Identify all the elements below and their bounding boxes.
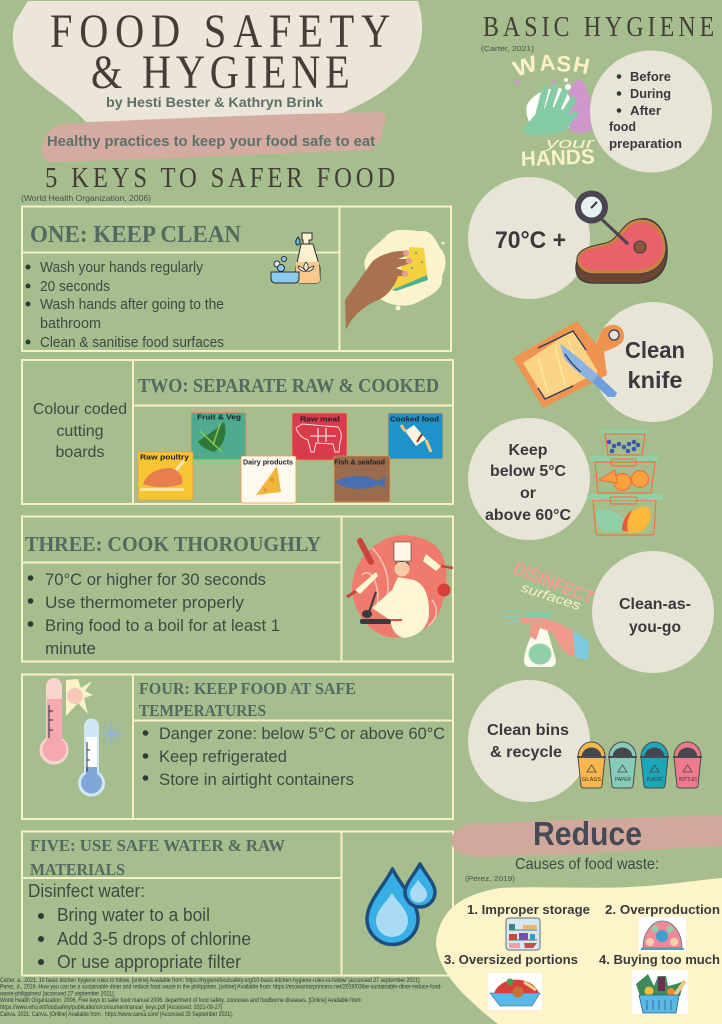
bin: bottles: BOTTLES — [679, 777, 698, 783]
title: & HYGIENE — [91, 46, 350, 99]
board: fish and seafood: Fish & seafood — [334, 460, 385, 466]
bin: plastic: PLASTIC — [647, 777, 663, 783]
icon: cutting board and knife — [513, 321, 624, 408]
bin: paper: PAPER — [615, 777, 631, 783]
board: cooked food — [388, 413, 443, 459]
heading three: THREE: COOK THOROUGHLY — [25, 532, 321, 556]
label: colour coded cutting boards: boards — [56, 444, 104, 461]
icon: cold thermometer — [78, 718, 124, 797]
citation: Perez: (Perez, 2019) — [465, 874, 516, 883]
circle: clean bins — [468, 680, 590, 802]
tagline: Healthy practices to keep your food safe to eat — [47, 133, 375, 150]
authors: by Hesti Bester & Kathryn Brink — [106, 94, 323, 110]
title — [50, 5, 390, 99]
circle: before during after: Before — [630, 70, 671, 84]
panel: causes of food waste — [436, 878, 722, 1024]
icon: disinfect surfaces: DISINFECT — [510, 558, 597, 610]
icon: basket of groceries — [632, 970, 688, 1014]
list one: Wash your hands regularly — [40, 259, 203, 276]
heading five: FIVE: USE SAFE WATER & RAW — [30, 836, 285, 855]
circle: 70C — [468, 177, 590, 299]
board: fruit and veg — [191, 412, 246, 460]
heading four: FOUR: KEEP FOOD AT SAFE — [139, 679, 356, 698]
circle: before during after: During — [630, 87, 671, 101]
icon: steak with thermometer — [575, 190, 667, 283]
panel: two separate raw and cooked — [22, 360, 453, 504]
circle: clean knife: Clean — [625, 337, 685, 363]
circle: before during after: food — [609, 120, 636, 134]
list three: Bring food to a boil for at least 1 — [45, 616, 280, 635]
heading four — [139, 679, 356, 720]
icon: disinfect surfaces: surfaces — [519, 580, 583, 613]
circle: clean bins: Clean bins — [487, 722, 569, 739]
title blob — [13, 1, 422, 122]
circle: keep below: above 60°C — [485, 507, 571, 524]
heading two: TWO: SEPARATE RAW & COOKED — [138, 375, 439, 397]
circle: before during after: After — [630, 104, 661, 118]
circle: keep below: below 5°C — [490, 463, 566, 480]
icon: wash your hands: H — [571, 51, 592, 79]
title: FOOD SAFETY — [50, 5, 390, 58]
list one: Wash hands after going to the — [40, 296, 224, 313]
references: waste-philippines/ [accessed 27 september 2021]. — [0, 992, 115, 998]
label: colour coded cutting boards — [33, 401, 127, 461]
cause 1: 1. Improper storage — [467, 902, 590, 917]
list four: Store in airtight containers — [159, 770, 354, 789]
bin: glass: GLASS — [582, 777, 602, 783]
list five: Add 3-5 drops of chlorine — [57, 928, 251, 949]
citation: WHO: (World Health Organization, 2006) — [21, 194, 151, 203]
cause 2: 2. Overproduction — [605, 902, 720, 917]
list five: Or use appropriate filter — [57, 951, 241, 972]
circle: clean as you go — [592, 551, 714, 673]
circle: keep below: Keep — [508, 442, 548, 459]
references: https://www.who.int/foodsafety/publications/consumer/manual_keys.pdf [Accessed: 2021-09-27] — [0, 1005, 222, 1011]
icon: display of cakes — [639, 917, 686, 952]
icon: wash your hands: S — [556, 51, 572, 77]
icon: chef — [347, 535, 453, 638]
references: Carter, a., 2021. 10 basic kitchen hygiene rules to follow. [online] Available from: https://hygienefoodsafety.org/10-basic-kitchen-hygiene-rules-to-follow/ [accessed 27 september 2021]. — [0, 978, 421, 984]
pink brush band: reduce — [451, 815, 722, 857]
label: colour coded cutting boards: Colour coded — [33, 401, 127, 418]
heading four: TEMPERATURES — [139, 701, 266, 720]
icon: water drops — [367, 864, 435, 944]
references — [0, 978, 442, 1018]
heading: reduce: Reduce — [533, 815, 642, 852]
circle: keep below — [468, 418, 590, 540]
icon: wash your hands: W — [510, 50, 541, 82]
circle: clean bins: & recycle — [490, 744, 562, 761]
icon: wash your hands: A — [538, 49, 557, 76]
heading: basic hygiene: BASIC HYGIENE — [483, 11, 714, 42]
list four: Danger zone: below 5°C or above 60°C — [159, 724, 445, 743]
icon: soap — [271, 233, 320, 283]
list four — [143, 724, 445, 789]
icon: hot thermometer — [40, 678, 93, 765]
panel: one keep clean — [22, 206, 451, 351]
list five: Disinfect water: — [28, 881, 145, 901]
board: dairy products — [241, 456, 296, 503]
board: fish and seafood — [334, 456, 390, 502]
icon: recycling bins — [577, 742, 702, 788]
icon: disinfect surfaces — [502, 558, 597, 667]
board: cooked food: Cooked food — [390, 416, 439, 424]
panel: four safe temperatures — [22, 674, 453, 819]
icon: hand scrubbing with sponge — [345, 230, 446, 330]
icon: wash your hands — [510, 49, 597, 171]
board: raw poultry: Raw poultry — [140, 454, 189, 462]
circle: clean knife — [593, 302, 713, 422]
list three: minute — [45, 639, 96, 658]
list one — [26, 259, 224, 351]
board: fruit and veg: Fruit & Veg — [197, 414, 241, 422]
circle: 70C: 70°C + — [495, 227, 566, 254]
pink brush banner — [41, 112, 386, 162]
heading: 5 keys: 5 KEYS TO SAFER FOOD — [45, 161, 395, 193]
label: colour coded cutting boards: cutting — [56, 423, 104, 440]
icon: wash your hands: your — [544, 135, 596, 152]
heading five: MATERIALS — [30, 860, 125, 879]
list one: bathroom — [40, 315, 101, 332]
circle: clean as you go: Clean-as- — [619, 596, 691, 613]
list three: Use thermometer properly — [45, 593, 244, 612]
circle: clean knife: knife — [628, 367, 682, 393]
list five: Bring water to a boil — [57, 904, 210, 925]
heading five — [30, 836, 285, 879]
circle: clean as you go: you-go — [629, 619, 681, 636]
list one: 20 seconds — [40, 278, 110, 295]
list three: 70°C or higher for 30 seconds — [45, 570, 266, 589]
board: raw meat: Raw meat — [300, 416, 341, 424]
circle: before during after: preparation — [609, 137, 682, 151]
list five — [28, 881, 251, 972]
board: raw meat — [292, 413, 347, 460]
cause 4: 4. Buying too much — [599, 952, 720, 967]
citation: Carter: (Carter, 2021) — [481, 44, 535, 53]
subheading: causes of food waste: Causes of food waste: — [515, 856, 659, 873]
references: Canva, 2021. Canva. [Online] Available from : https://www.canva.com/ [Accessed 25 September 2021]. — [0, 1012, 233, 1018]
cause 3: 3. Oversized portions — [444, 952, 578, 967]
panel: three cook thoroughly — [22, 516, 453, 662]
circle: before during after — [590, 50, 712, 172]
list three — [28, 570, 280, 658]
circle: keep below: or — [520, 485, 536, 502]
board: raw poultry — [138, 452, 193, 500]
heading one: ONE: KEEP CLEAN — [30, 222, 242, 248]
references: Perez, d., 2019. How you can be a sustainable diner and reduce food waste in the philippines. [online] Available from: https://ecowarriorprincess.net/2019/03/be-sustainable-diner-reduce-food- — [0, 984, 442, 990]
icon: fridge — [506, 918, 540, 950]
list four: Keep refrigerated — [159, 747, 287, 766]
icon: wash your hands: HANDS — [520, 145, 595, 171]
list one: Clean & sanitise food surfaces — [40, 334, 224, 351]
icon: salad bowl — [488, 973, 542, 1010]
board: dairy products: Dairy products — [243, 460, 293, 466]
icon: stacked food containers — [587, 430, 663, 535]
references: World Health Organization. 2006. Five keys to safer food manual 2006. department of food safety, zoonoses and foodborne diseases. [Online] Available from: — [0, 998, 362, 1004]
panel: five safe water — [22, 831, 453, 976]
